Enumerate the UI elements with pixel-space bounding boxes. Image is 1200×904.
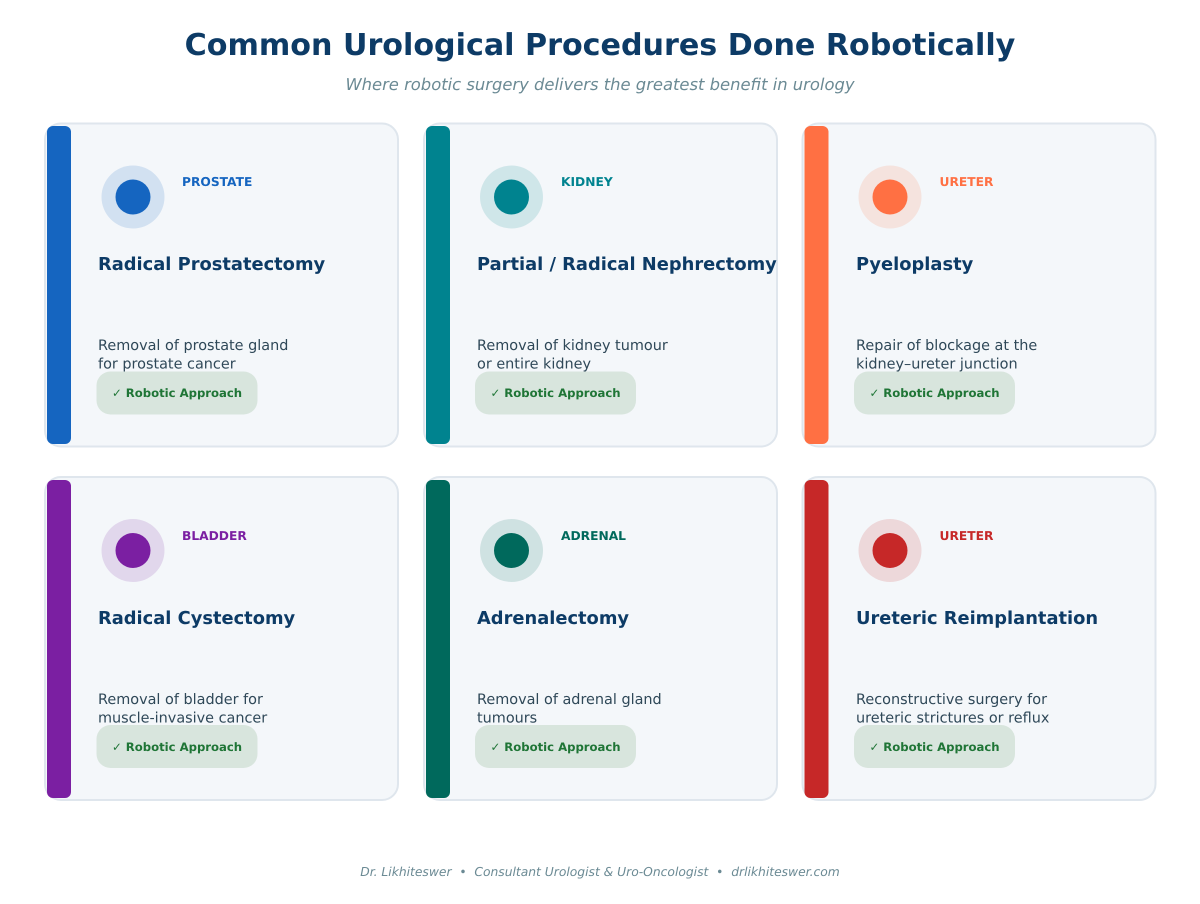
panel: ureteric reimplantation (802, 477, 1156, 800)
panel: pyeloplasty (802, 124, 1156, 446)
badge: robotic approach: ✓ Robotic Approach (490, 386, 621, 400)
description: Removal of adrenal gland (477, 692, 662, 708)
badge: robotic approach: ✓ Robotic Approach (112, 740, 242, 754)
procedure name: Adrenalectomy (477, 608, 629, 629)
panel: nephrectomy (424, 124, 777, 446)
description: Repair of blockage at the (856, 338, 1037, 354)
title: Common Urological Procedures Done Robotically (185, 28, 1016, 63)
footer: Dr. Likhiteswer • Consultant Urologist & Uro-Oncologist • drlikhiteswer.com (360, 865, 840, 879)
category label: URETER (940, 529, 994, 543)
accent bar: adrenal (426, 480, 450, 798)
accent bar: ureter (804, 480, 828, 798)
badge: robotic approach: ✓ Robotic Approach (870, 740, 1000, 754)
description: kidney–ureter junction (856, 356, 1018, 372)
badge: robotic approach (96, 725, 258, 768)
description: Removal of bladder for (98, 692, 263, 708)
icon: ureter (858, 166, 922, 228)
badge: robotic approach (475, 725, 636, 768)
procedure name: Radical Cystectomy (98, 608, 296, 629)
badge: robotic approach: ✓ Robotic Approach (112, 386, 242, 400)
category label: KIDNEY (561, 175, 613, 189)
category label: PROSTATE (182, 175, 252, 189)
accent bar: ureter (804, 126, 828, 444)
description: for prostate cancer (98, 356, 236, 372)
category label: ADRENAL (561, 529, 626, 543)
procedure name: Radical Prostatectomy (98, 254, 326, 275)
description: Removal of prostate gland (98, 338, 288, 354)
icon: ureter (858, 519, 922, 582)
description: muscle-invasive cancer (98, 710, 267, 726)
icon: prostate (102, 166, 164, 228)
description: or entire kidney (477, 356, 591, 372)
procedure name: Pyeloplasty (856, 254, 974, 275)
panel: adrenalectomy (424, 477, 777, 800)
description: tumours (477, 710, 537, 726)
description: Removal of kidney tumour (477, 338, 668, 354)
badge: robotic approach (96, 372, 258, 414)
icon: bladder (102, 519, 164, 582)
badge: robotic approach (854, 372, 1015, 414)
icon: adrenal (480, 519, 543, 582)
badge: robotic approach (854, 725, 1015, 768)
badge: robotic approach (475, 372, 636, 414)
description: ureteric strictures or reflux (856, 710, 1050, 726)
category label: URETER (940, 175, 994, 189)
accent bar: prostate (47, 126, 71, 444)
accent bar: kidney (426, 126, 450, 444)
subtitle: Where robotic surgery delivers the greatest benefit in urology (345, 75, 855, 94)
icon: kidney (480, 166, 543, 228)
badge: robotic approach: ✓ Robotic Approach (490, 740, 621, 754)
panel: radical prostatectomy (45, 124, 398, 446)
procedure name: Partial / Radical Nephrectomy (477, 254, 777, 275)
panel: radical cystectomy (45, 477, 398, 800)
procedure name: Ureteric Reimplantation (856, 608, 1098, 629)
badge: robotic approach: ✓ Robotic Approach (870, 386, 1000, 400)
accent bar: bladder (47, 480, 71, 798)
category label: BLADDER (182, 529, 247, 543)
description: Reconstructive surgery for (856, 692, 1047, 708)
